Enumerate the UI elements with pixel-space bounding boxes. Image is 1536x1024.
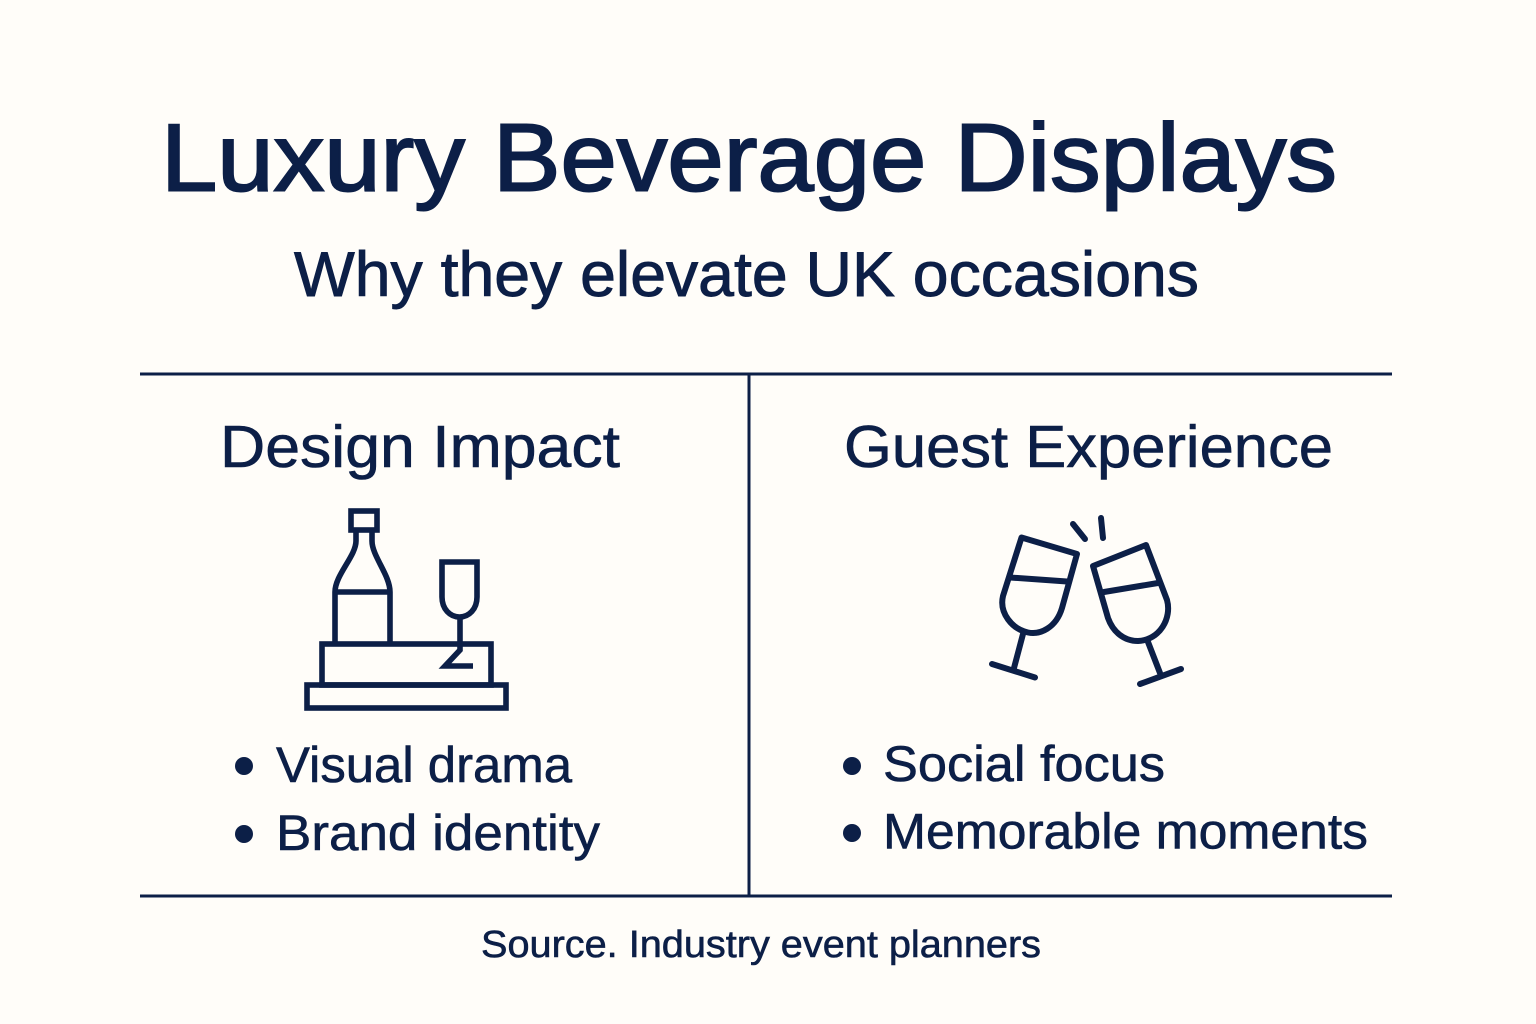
panel: design impact [220, 414, 620, 861]
panel: guest experience [843, 414, 1368, 860]
bullet list: design impact: Visual drama [276, 737, 572, 793]
heading: guest experience: Guest Experience [844, 414, 1333, 480]
bullet list: guest experience: Social focus [883, 736, 1165, 792]
subtitle: Why they elevate UK occasions [294, 240, 1199, 310]
bullet list: design impact: Brand identity [276, 805, 600, 861]
source note: Source. Industry event planners [481, 924, 1041, 966]
icon: bottle and glass on plinth [307, 511, 506, 708]
icon: clinking glasses [992, 518, 1181, 684]
bullet list: guest experience [843, 736, 1368, 860]
bullet list: design impact [235, 737, 600, 861]
title: Luxury Beverage Displays [161, 104, 1337, 212]
bullet list: guest experience: Memorable moments [883, 804, 1368, 860]
heading: design impact: Design Impact [220, 414, 620, 480]
